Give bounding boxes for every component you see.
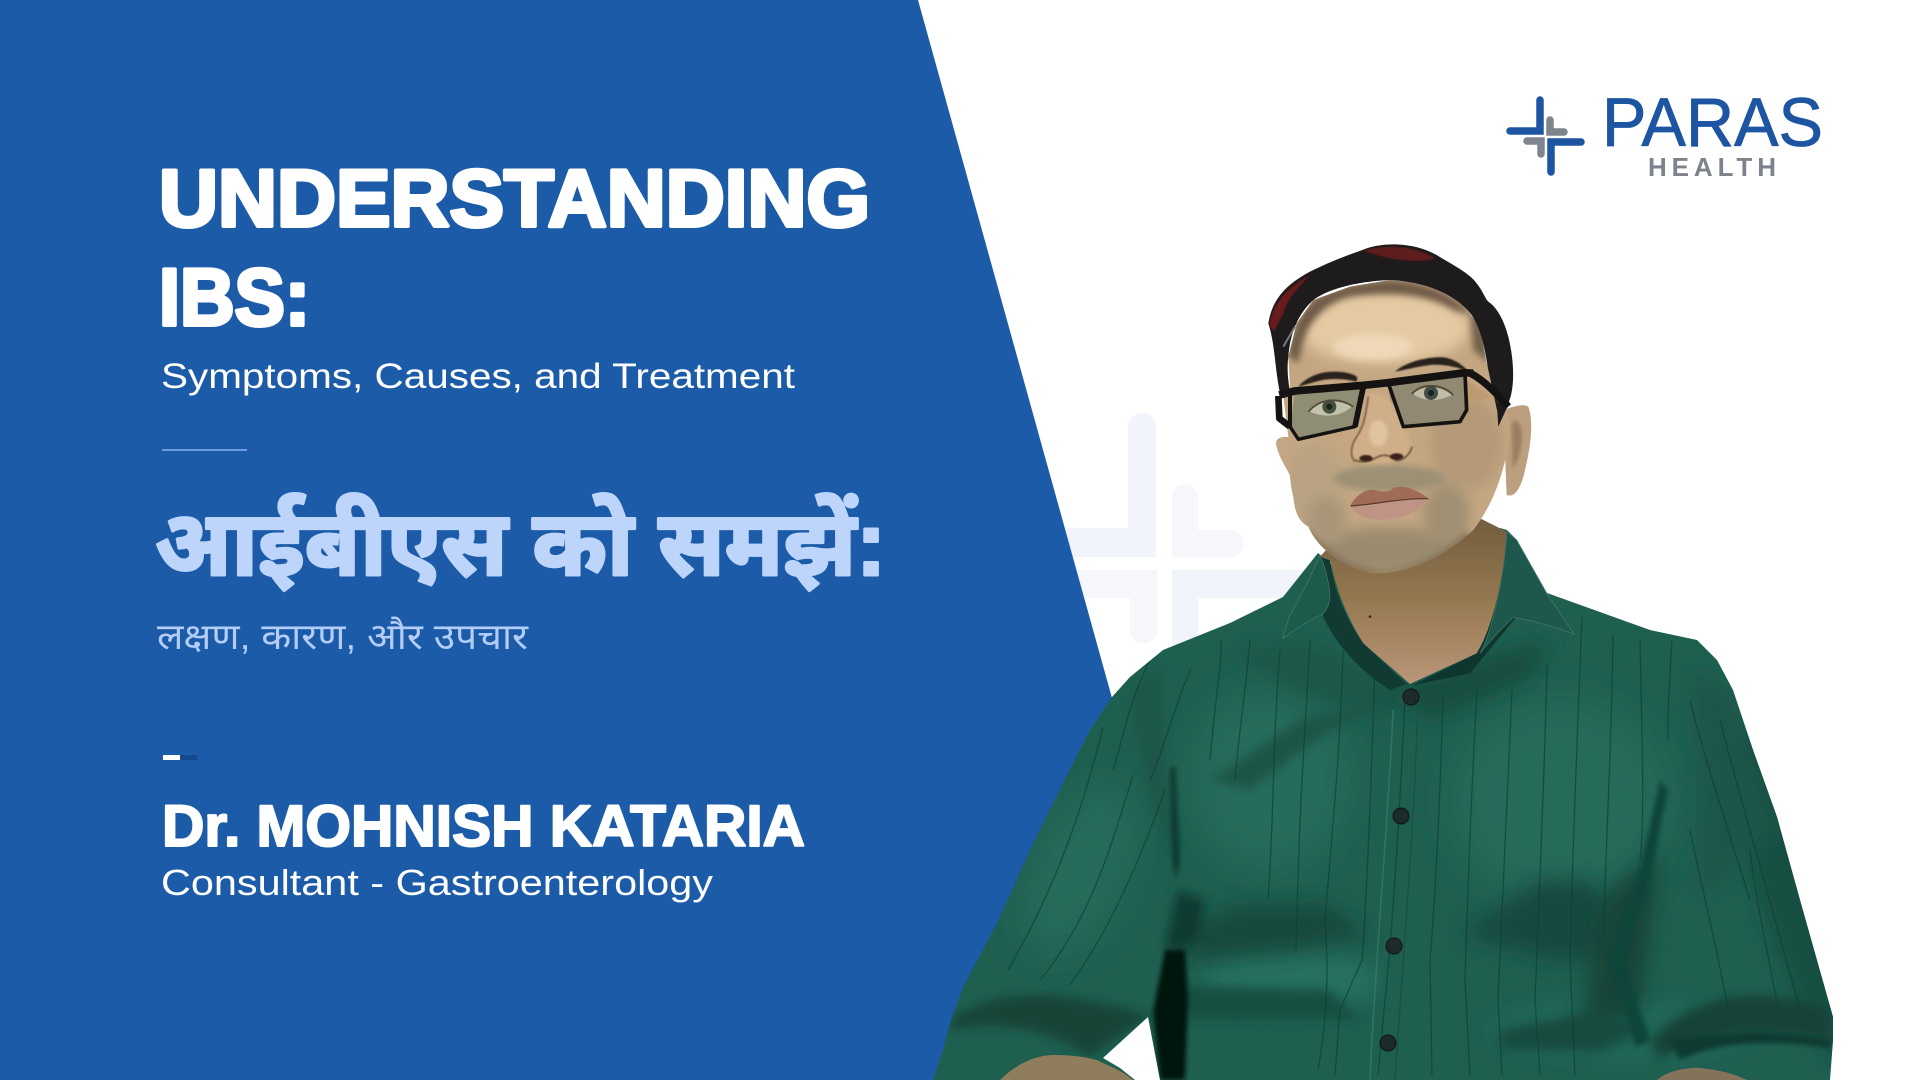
doctor name: Dr. MOHNISH KATARIA	[162, 794, 805, 859]
title: UNDERSTANDING IBS: UNDERSTANDING	[159, 154, 870, 244]
placket	[1370, 710, 1417, 1080]
panel: blue angled panel	[0, 0, 1112, 1080]
icon: logo cross	[1510, 100, 1581, 172]
left eye	[1308, 400, 1353, 416]
left hand	[1000, 1055, 1133, 1080]
logo: Paras Health	[1510, 84, 1823, 182]
skin	[1283, 280, 1510, 573]
nose	[1351, 393, 1412, 464]
arm separation shadows	[1153, 765, 1668, 1080]
logo tagline: HEALTH	[1648, 152, 1776, 182]
hair red highlight	[1269, 275, 1310, 332]
mouth	[1350, 487, 1429, 520]
watermark cross logo	[1040, 413, 1340, 700]
photo: doctor portrait	[920, 244, 1894, 1080]
shirt highlights and shadows	[950, 640, 1894, 1080]
accent dash	[163, 755, 197, 760]
neck and collar	[1283, 510, 1574, 690]
subtitle: Hindi: लक्षण, कारण, और उपचार	[157, 616, 529, 657]
gap under left arm	[1103, 1017, 1160, 1080]
logo wordmark: PARAS	[1602, 84, 1823, 161]
right hand	[1657, 1068, 1747, 1080]
forehead highlight	[1297, 290, 1470, 363]
doctor role: Consultant - Gastroenterology	[161, 862, 713, 903]
hair	[1268, 244, 1513, 427]
left collar	[1283, 555, 1330, 638]
moustache and beard shadow	[1333, 465, 1447, 492]
title: Hindi: आईबीएस को समझें:	[155, 493, 886, 595]
subtitle: English: Symptoms, Causes, and Treatment	[161, 357, 795, 396]
shirt stripes	[1008, 615, 1800, 1075]
shirt	[920, 520, 1894, 1080]
title: UNDERSTANDING IBS: IBS:	[159, 253, 310, 343]
right ear	[1503, 405, 1531, 496]
lenses	[1290, 386, 1363, 439]
inner collar band	[1320, 557, 1407, 690]
glasses frame	[1278, 373, 1508, 439]
title: UNDERSTANDING IBS	[159, 154, 870, 343]
shirt buttons	[1380, 689, 1419, 1051]
divider line	[162, 449, 247, 451]
left ear	[1276, 437, 1292, 478]
face	[1268, 244, 1531, 583]
right collar	[1480, 532, 1574, 653]
right eye	[1412, 386, 1453, 400]
soft hairline	[1288, 280, 1472, 363]
eyebrows	[1298, 372, 1357, 387]
